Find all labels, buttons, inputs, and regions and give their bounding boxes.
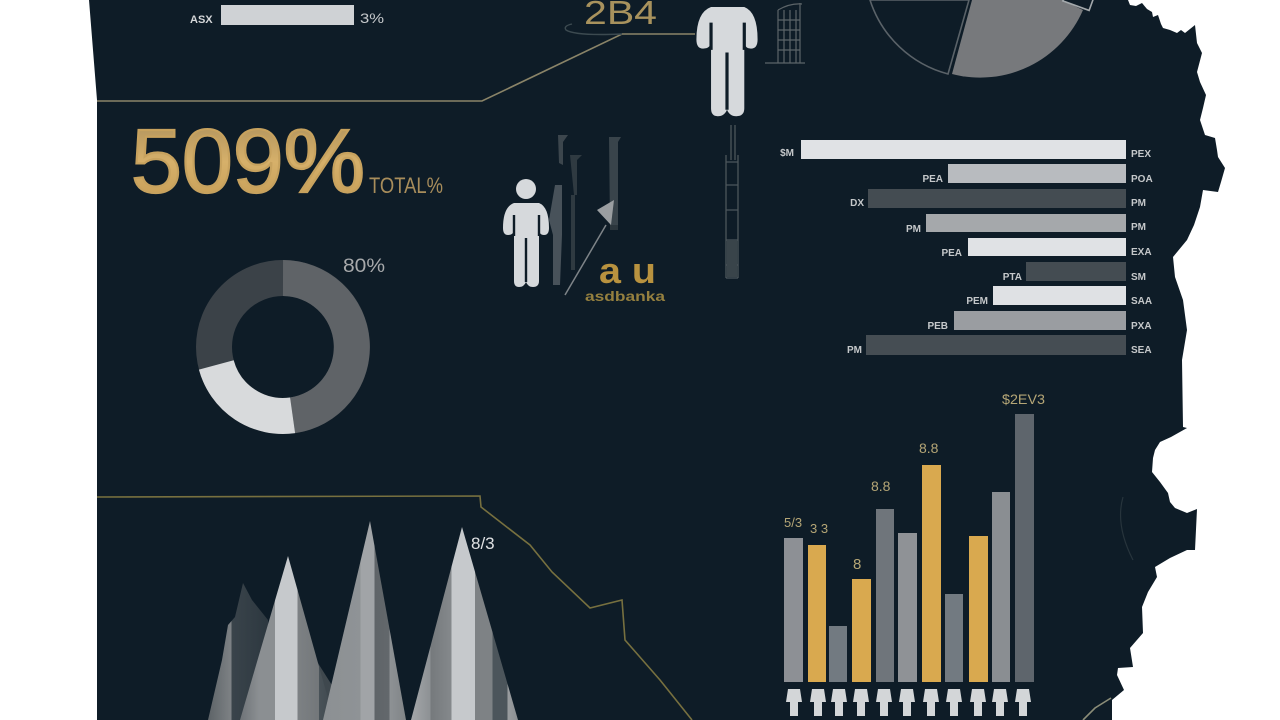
horizontal bar chart: SAA: [1131, 296, 1152, 307]
headline statistic: TOTAL%: [369, 173, 443, 198]
thin tower: [726, 125, 738, 278]
horizontal bar chart: PEA: [922, 174, 943, 185]
annotation text: asdbanka: [585, 288, 665, 304]
lower border line: [97, 496, 692, 720]
horizontal bar chart: SEA: [1131, 345, 1152, 356]
corner border line: [1083, 698, 1111, 720]
horizontal bar chart: DX: [850, 198, 864, 209]
horizontal bar chart: PM: [1131, 198, 1146, 209]
vertical bar chart: 8: [853, 556, 861, 573]
person icon row: [786, 689, 1031, 716]
annotation text: [585, 250, 665, 304]
top small bar with labels: 3%: [360, 10, 384, 26]
vertical bar chart: 8.8: [871, 478, 891, 494]
vertical bar chart: 5/3: [784, 515, 802, 530]
person icon: small: [503, 179, 549, 287]
year label: [565, 0, 657, 34]
pie chart: [870, 0, 1093, 78]
horizontal bar chart: PM: [1131, 222, 1146, 233]
vertical bar chart: 8.8: [919, 440, 939, 456]
horizontal bar chart: POA: [1131, 174, 1153, 185]
person icon: large: [696, 0, 758, 116]
donut chart: [214, 256, 385, 416]
vertical bar chart: [784, 391, 1045, 682]
horizontal bar chart: [780, 140, 1153, 356]
horizontal bar chart: $M: [780, 148, 794, 159]
horizontal bar chart: EXA: [1131, 247, 1152, 258]
peaks chart: 8/3: [471, 534, 495, 553]
horizontal bar chart: PEA: [941, 248, 962, 259]
horizontal bar chart: PTA: [1003, 272, 1022, 283]
faint arc: [1121, 497, 1133, 560]
horizontal bar chart: PEB: [927, 321, 948, 332]
top connector line: [97, 34, 695, 101]
horizontal bar chart: PM: [906, 224, 921, 235]
horizontal bar chart: PXA: [1131, 321, 1152, 332]
horizontal bar chart: SM: [1131, 272, 1146, 283]
headline statistic: 509%: [131, 112, 365, 212]
horizontal bar chart: PEX: [1131, 149, 1151, 160]
horizontal bar chart: PEM: [966, 296, 988, 307]
top small bar with labels: ASX: [190, 14, 213, 26]
vertical bar chart: 3 3: [810, 521, 828, 536]
decorative faint columns: [549, 135, 621, 295]
tower icon: top: [765, 3, 805, 63]
vertical bar chart: $2EV3: [1002, 391, 1045, 407]
horizontal bar chart: PM: [847, 345, 862, 356]
annotation text: a u: [599, 250, 656, 291]
top small bar with labels: [190, 5, 384, 26]
donut chart: 80%: [343, 256, 385, 277]
peaks chart: [208, 521, 518, 720]
